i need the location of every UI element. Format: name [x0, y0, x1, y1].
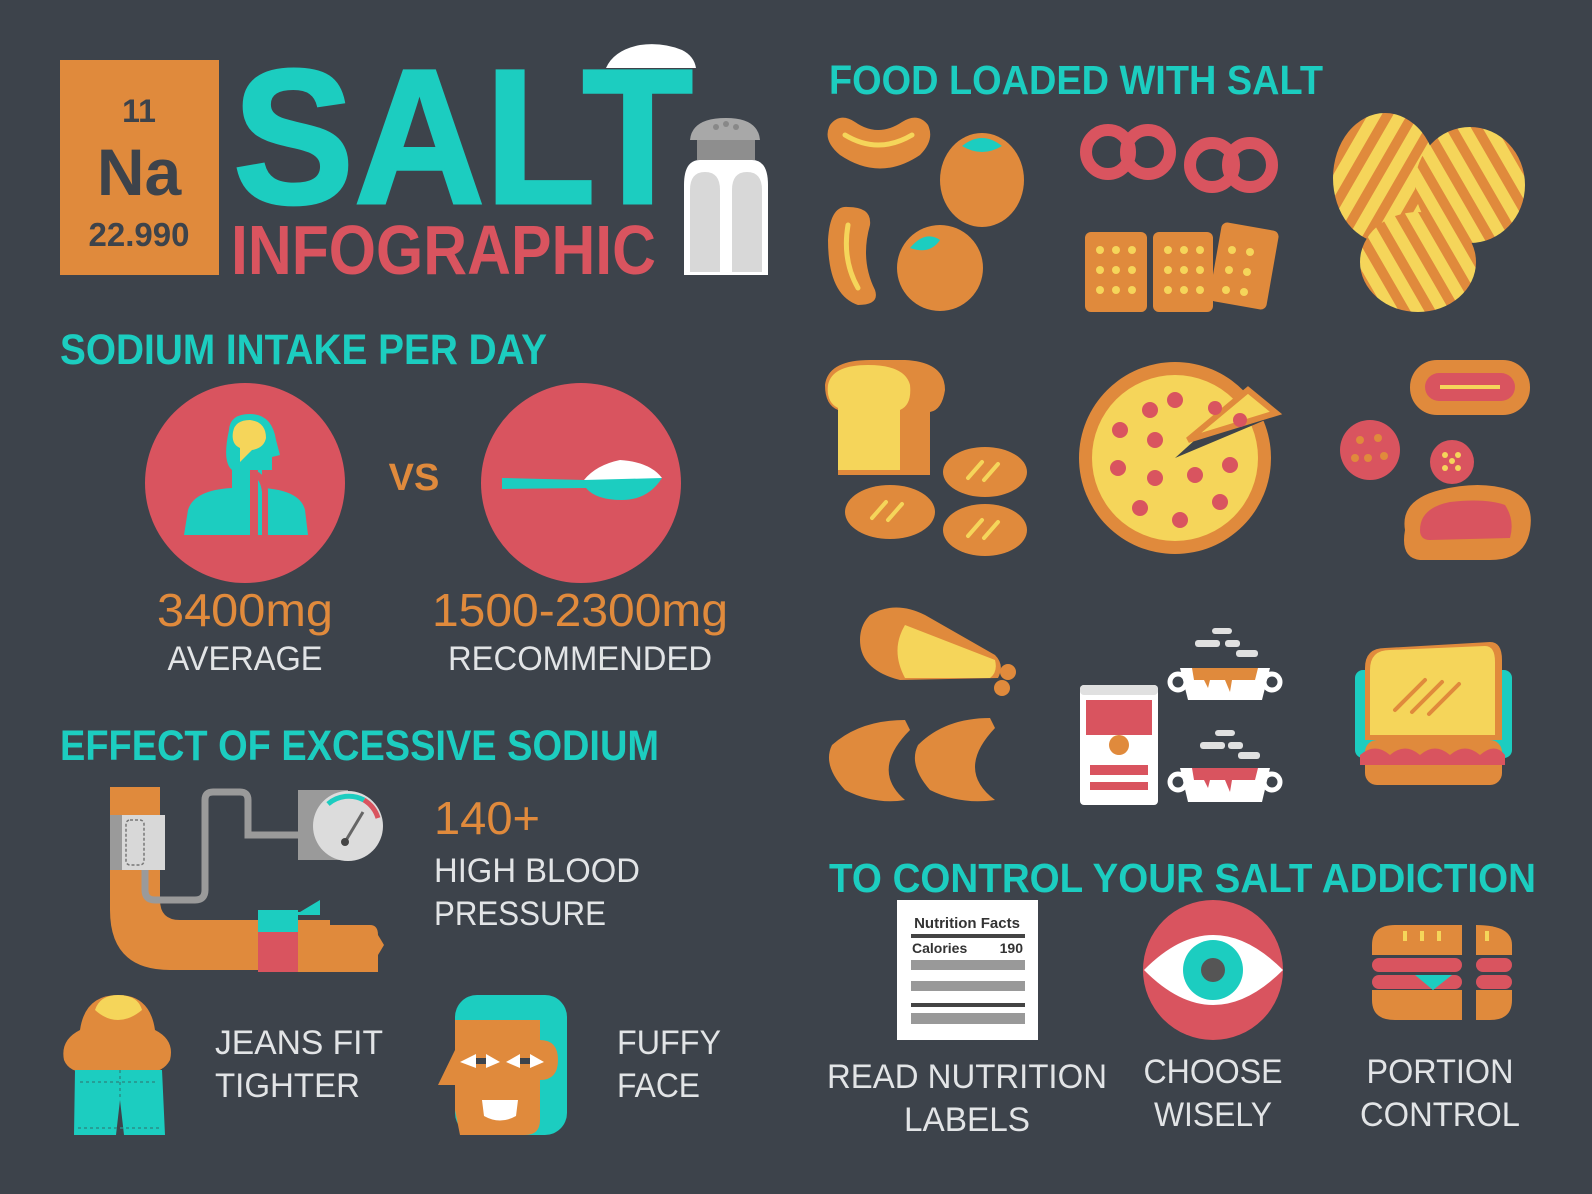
stat: high blood pressure — [434, 792, 640, 933]
food: sandwich — [1355, 642, 1512, 785]
text: puffy face: FUFFY — [617, 1024, 721, 1062]
stat: recommended: 1500-2300mg — [432, 584, 728, 636]
stat: high blood pressure: PRESSURE — [434, 895, 606, 933]
heading: food loaded with salt: FOOD LOADED WITH SALT — [829, 57, 1323, 103]
heading: effect of excessive sodium: EFFECT OF EXCESSIVE SODIUM — [60, 722, 659, 770]
text: choose wisely: CHOOSE — [1144, 1053, 1282, 1091]
stat: high blood pressure: HIGH BLOOD — [434, 852, 640, 890]
food: sausage and nuts — [828, 118, 1024, 311]
text: puffy face: FACE — [617, 1067, 700, 1105]
icon: tight jeans — [63, 995, 171, 1135]
icon: puffy face — [438, 995, 567, 1135]
subtitle: INFOGRAPHIC: INFOGRAPHIC — [231, 211, 656, 289]
text: jeans fit tighter: JEANS FIT — [215, 1024, 383, 1062]
stat: average: 3400mg — [157, 584, 333, 636]
icon: nutrition label — [897, 900, 1038, 1040]
icon: eye — [1143, 900, 1283, 1040]
food: bread and buns — [825, 360, 1027, 556]
icon: spoon circle — [481, 383, 681, 583]
icon: salt shaker — [684, 118, 768, 275]
food: canned soup — [1080, 628, 1280, 805]
icon: burger portion — [1372, 925, 1512, 1020]
icon: blood pressure arm — [110, 787, 384, 972]
text: jeans fit tighter: TIGHTER — [215, 1067, 360, 1105]
stat: recommended — [432, 584, 728, 678]
element tile: Na — [60, 60, 219, 275]
text: read nutrition labels: LABELS — [904, 1101, 1030, 1139]
salt pile on T — [606, 44, 696, 68]
text: choose wisely — [1144, 1053, 1282, 1134]
food: pizza — [1079, 362, 1276, 554]
food: chips — [1333, 113, 1525, 312]
title: SALT: SALT — [233, 29, 693, 244]
stat: recommended: RECOMMENDED — [448, 640, 712, 678]
heading: to control your salt addiction: TO CONTROL YOUR SALT ADDICTION — [829, 855, 1536, 901]
vs: VS — [389, 457, 439, 499]
stat: high blood pressure: 140+ — [434, 792, 540, 844]
icon: person circle — [145, 383, 345, 583]
element tile: Na: 11 — [122, 93, 156, 129]
text: portion control — [1360, 1053, 1520, 1134]
heading: sodium intake per day: SODIUM INTAKE PER DAY — [60, 326, 547, 374]
icon: nutrition label: Nutrition Facts — [914, 915, 1020, 932]
text: choose wisely: WISELY — [1154, 1096, 1272, 1134]
food: pretzels and crackers — [1085, 130, 1280, 312]
food: chicken — [829, 608, 1016, 801]
icon: nutrition label: 190 — [1000, 940, 1023, 956]
stat: average: AVERAGE — [168, 640, 322, 678]
icon: nutrition label: Calories — [912, 940, 967, 956]
food: sausage, salami, steak — [1340, 360, 1531, 560]
text: read nutrition labels — [827, 1058, 1107, 1139]
text: puffy face — [617, 1024, 721, 1105]
text: portion control: CONTROL — [1360, 1096, 1520, 1134]
element tile: Na: 22.990 — [89, 216, 189, 253]
stat: average — [157, 584, 333, 678]
text: read nutrition labels: READ NUTRITION — [827, 1058, 1107, 1096]
text: jeans fit tighter — [215, 1024, 383, 1105]
element tile: Na: Na — [97, 135, 182, 209]
text: portion control: PORTION — [1366, 1053, 1514, 1091]
